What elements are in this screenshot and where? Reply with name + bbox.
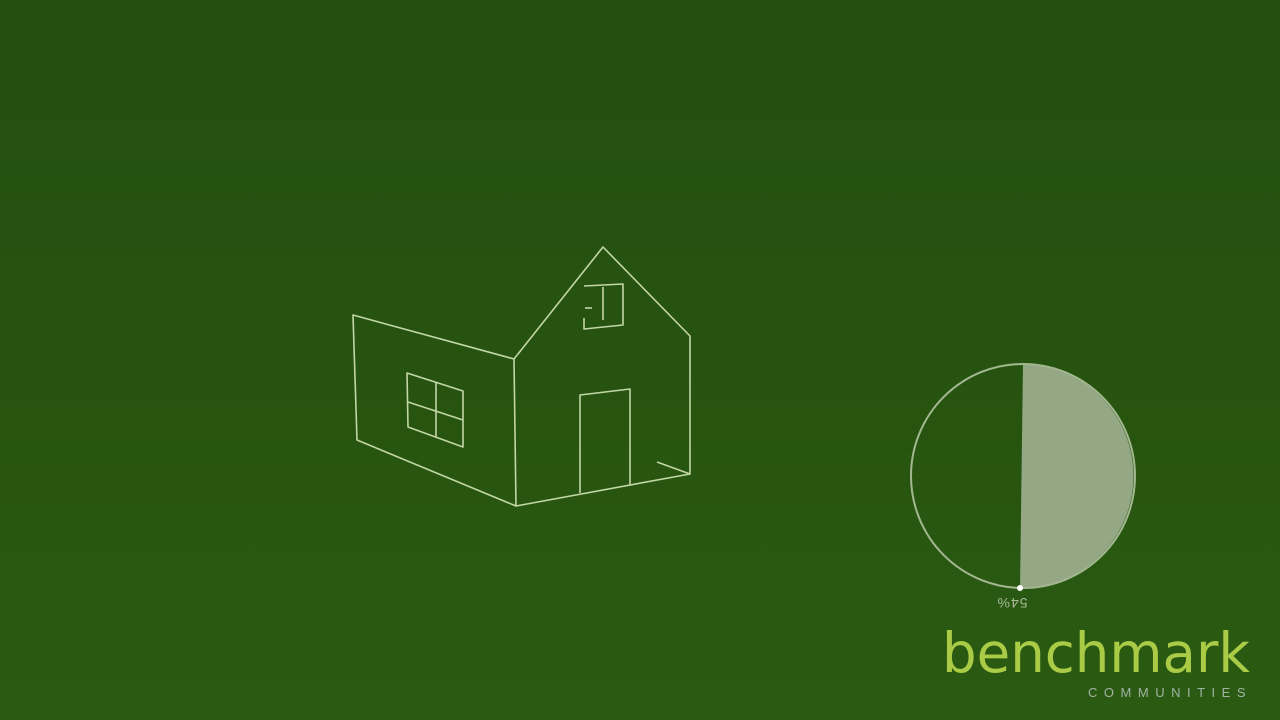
small base line — [657, 462, 690, 474]
icon: house line drawing — [353, 247, 690, 506]
side window — [407, 373, 463, 447]
logo: COMMUNITIES — [1088, 685, 1252, 700]
left wall — [353, 315, 516, 506]
pie label (upside-down): 54% — [996, 595, 1028, 611]
door — [580, 389, 630, 493]
gable window — [584, 284, 623, 329]
logo: benchmark — [942, 621, 1250, 685]
pie chart 54% — [911, 364, 1135, 591]
front wall with gable — [514, 247, 690, 506]
